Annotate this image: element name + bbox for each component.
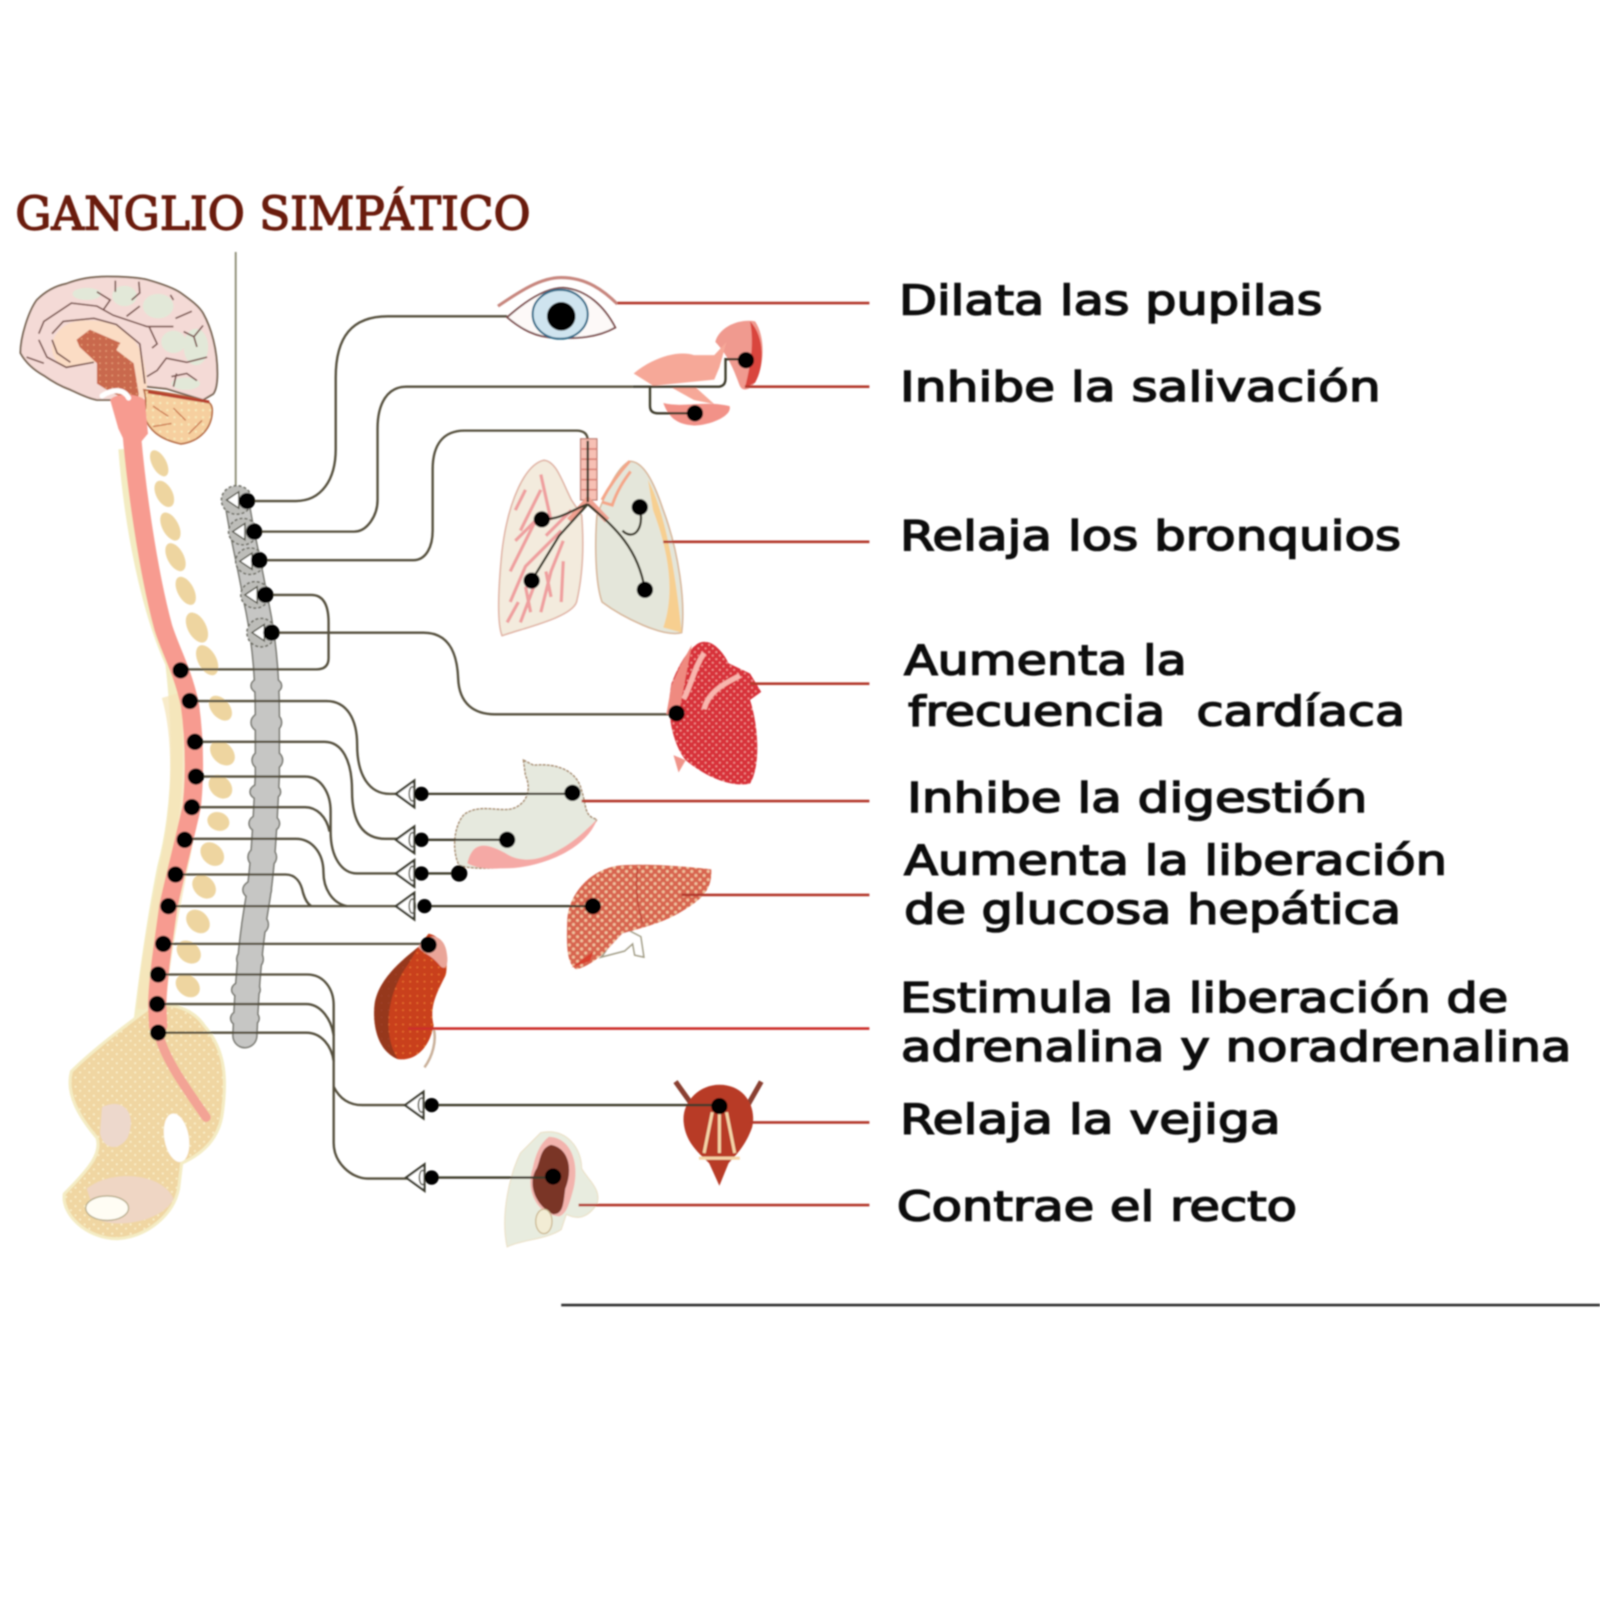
organ: rectum [505, 1132, 598, 1247]
effect label: heart rate [904, 636, 1405, 736]
red effector lines [408, 303, 869, 1205]
effect label: rectum: Contrae el recto [897, 1182, 1297, 1230]
effect label: bronchi: Relaja los bronquios [900, 512, 1401, 560]
ganglia and nerve synapse dots [149, 352, 754, 1191]
organ: liver [567, 865, 711, 969]
leader line: ganglion chain label [235, 252, 237, 492]
effect label: heart rate: frecuencia cardíaca [908, 688, 1405, 736]
sympathetic ganglion chain [231, 500, 283, 1036]
spine: vertebrae [124, 447, 240, 1020]
effect label: adrenaline: adrenalina y noradrenalina [901, 1023, 1571, 1071]
spinal cord [102, 391, 206, 1117]
organ: salivary glands [634, 321, 763, 426]
effect label: digestion: Inhibe la digestión [907, 774, 1367, 822]
effect label: adrenaline: Estimula la liberación de [900, 974, 1508, 1022]
organ: heart [666, 642, 761, 784]
brain [20, 277, 217, 444]
effect label: pupils: Dilata las pupilas [899, 276, 1322, 324]
organ: eye [498, 278, 617, 339]
effect label: hepatic glucose: Aumenta la liberación [904, 836, 1447, 884]
organ: bladder [676, 1082, 761, 1186]
nerve branches over organs [421, 359, 745, 1178]
effect label: adrenaline [900, 974, 1571, 1071]
nerve pathways [157, 316, 677, 1179]
effect label: salivation: Inhibe la salivación [900, 363, 1381, 411]
organ: adrenal gland and kidney [374, 934, 447, 1067]
effect label: heart rate: Aumenta la [904, 636, 1187, 684]
effect label: hepatic glucose [904, 836, 1447, 933]
pelvis [64, 1004, 225, 1239]
title: GANGLIO SIMPÁTICO [15, 186, 531, 241]
effect label: hepatic glucose: de glucosa hepática [904, 885, 1401, 933]
bottom rule [561, 1304, 1600, 1306]
organ: lungs [499, 439, 683, 636]
organ: stomach [455, 760, 597, 869]
effect label: bladder: Relaja la vejiga [900, 1096, 1281, 1144]
